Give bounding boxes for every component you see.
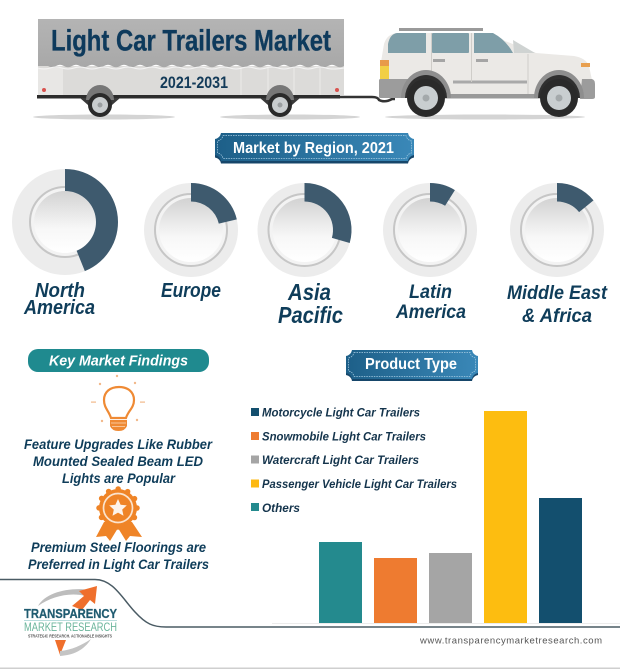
bar chart xyxy=(272,411,620,624)
logo: Transparency Market Research xyxy=(24,586,117,656)
donut: Asia Pacific: Asia xyxy=(287,279,331,305)
car xyxy=(379,28,595,117)
heading badge: Market by Region, 2021: Market by Region, 2021 xyxy=(233,140,394,157)
trailer xyxy=(37,19,395,117)
logo: Transparency Market Research: MARKET RESEARCH xyxy=(24,620,117,634)
legend: Others xyxy=(262,501,300,515)
donut: North America: North xyxy=(35,280,85,302)
finding 2 text: Premium Steel Floorings are xyxy=(31,539,206,555)
donut: Europe xyxy=(144,183,238,302)
donut: Middle East and Africa: & Africa xyxy=(522,305,592,327)
donut: North America: America xyxy=(23,297,95,319)
donut: Asia Pacific: Pacific xyxy=(278,302,343,328)
legend: Motorcycle Light Car Trailers xyxy=(262,406,420,420)
footer divider curve xyxy=(0,580,620,627)
heading badge: Market by Region, 2021 xyxy=(215,133,414,164)
legend: Watercraft Light Car Trailers xyxy=(262,453,419,467)
ground shadows xyxy=(33,114,585,120)
finding 2 text xyxy=(28,539,209,572)
finding 1 text: Mounted Sealed Beam LED xyxy=(33,453,203,469)
donut: Asia Pacific xyxy=(258,183,352,328)
icon: award medal xyxy=(96,489,142,541)
icon: light bulb xyxy=(91,375,145,431)
donut: North America xyxy=(12,169,118,319)
website url: www.transparencymarketresearch.com xyxy=(419,636,602,646)
title: Light Car Trailers Market xyxy=(51,24,331,58)
heading badge: Product Type: Product Type xyxy=(365,356,457,373)
logo: Transparency Market Research: STRATEGIC RESEARCH. ACTIONABLE INSIGHTS xyxy=(28,634,112,638)
logo: Transparency Market Research: TRANSPARENCY xyxy=(24,606,117,621)
legend xyxy=(251,406,457,515)
donut: Latin America xyxy=(383,183,477,323)
heading pill: Key Market Findings xyxy=(28,349,209,372)
finding 1 text: Lights are Popular xyxy=(62,470,176,486)
legend: Passenger Vehicle Light Car Trailers xyxy=(262,477,457,491)
heading badge: Product Type xyxy=(346,350,478,381)
finding 1 text: Feature Upgrades Like Rubber xyxy=(24,436,213,452)
donut: Europe: Europe xyxy=(161,280,221,302)
donut: Latin America: America xyxy=(395,302,466,323)
legend: Snowmobile Light Car Trailers xyxy=(262,430,426,444)
heading pill: Key Market Findings: Key Market Findings xyxy=(49,354,188,370)
donut: Latin America: Latin xyxy=(409,282,452,303)
finding 2 text: Preferred in Light Car Trailers xyxy=(28,556,209,572)
donut: Middle East and Africa: Middle East xyxy=(507,282,608,304)
finding 1 text xyxy=(24,436,213,486)
hero: trailer and car illustration xyxy=(33,19,595,120)
years: 2021-2031 xyxy=(160,73,228,92)
donut: Middle East and Africa xyxy=(507,183,608,327)
